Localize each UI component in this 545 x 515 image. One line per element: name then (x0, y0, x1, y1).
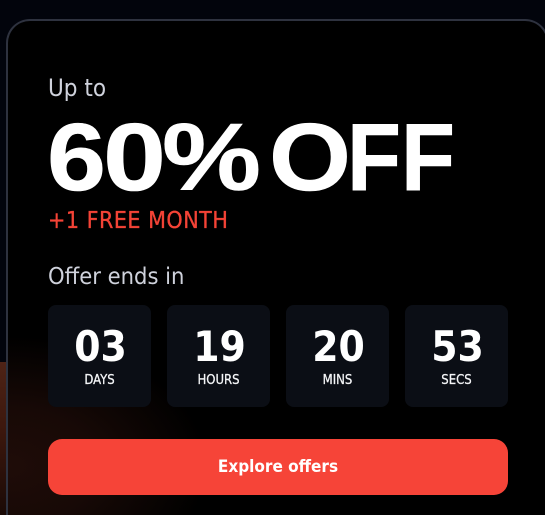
heading: 60% OFF: FF (347, 104, 455, 210)
text: up to: Up to (48, 74, 106, 102)
heading: 60% OFF: 0 (103, 104, 166, 210)
heading: 60% OFF: O (269, 104, 351, 210)
countdown: secs: SECS (441, 373, 472, 388)
countdown: mins (286, 305, 389, 407)
heading: 60% OFF: % (162, 104, 261, 210)
countdown: secs: 53 (431, 322, 484, 371)
countdown: mins: MINS (323, 373, 352, 388)
button: explore offers: Explore offers (218, 457, 338, 477)
countdown: days (48, 305, 151, 407)
heading: 60% OFF: 6 (47, 104, 106, 210)
countdown: hours: HOURS (197, 373, 240, 388)
countdown: days: DAYS (84, 373, 115, 388)
countdown: days: 03 (74, 322, 127, 371)
countdown: mins: 20 (312, 322, 365, 371)
heading: 60% OFF (47, 104, 455, 210)
text: free month: +1 FREE MONTH (48, 208, 228, 234)
countdown: hours (167, 305, 270, 407)
countdown: secs (405, 305, 508, 407)
countdown: hours: 19 (193, 322, 246, 371)
text: offer ends in: Offer ends in (48, 262, 184, 290)
background image glow left of card (0, 362, 7, 515)
button: explore offers (48, 439, 508, 495)
